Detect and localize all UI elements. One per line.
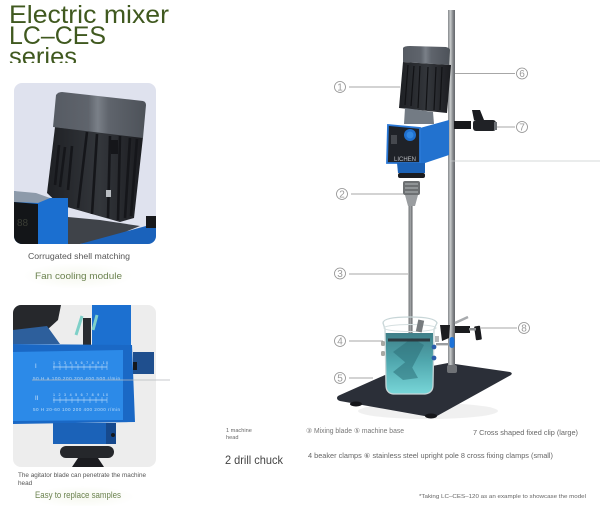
upper blue block with shaft [76,305,131,345]
motor grey cap [53,92,146,138]
mixing blade shaft [408,200,412,345]
callout 2: 2 [339,190,345,200]
drill chuck [403,181,420,206]
callout 5 [334,372,373,384]
mount base [68,216,156,244]
leader line: scale plate [32,379,170,381]
motor mount and collar [397,163,425,178]
blue scale plate: 50 H 20-60 100 200 400 2000 r/min [33,407,120,412]
black motor corner [13,305,61,344]
control box: LICHEN [394,156,416,163]
lower blue housing and collar [53,423,116,467]
legend: beaker clamps, pole and small clamps: 4 beaker clamps ⑥ stainless steel upright pole 8 cross fixing clamps (small) [308,451,553,460]
blue scale plate: 50 H a 100 200 300 400 500 r/min [33,376,120,381]
motor black body [399,62,451,113]
legend: machine head: head [226,435,238,441]
title: Electric mixer [9,1,169,29]
footnote: *Taking LC–CES–120 as an example to showcase the model [419,494,586,500]
legend: machine head [226,428,252,441]
callout 5: 5 [337,374,343,384]
cross fixing clamp small [440,317,482,348]
legend: mixing blade and machine base: ③ Mixing blade ⑤ machine base [306,427,404,435]
panel: fan cooling module photo [14,83,156,244]
title: LC–CES [9,22,106,50]
title [10,5,169,63]
caption: agitator blade: head [18,480,33,487]
blue scale plate: II [35,396,39,402]
motor grey cap [403,46,450,65]
beaker clamps [381,336,452,360]
stainless upright pole [447,10,457,373]
side clamp block [133,352,154,374]
motor body [47,127,143,222]
caption: fan cooling module [23,263,133,289]
caption: easy to replace samples: Easy to replace samples [35,490,122,500]
legend: drill chuck: 2 drill chuck [225,454,283,467]
long decorative leader [450,160,600,162]
panel: blade through head photo [13,305,156,467]
callout 8: 8 [521,324,527,334]
callout 1 [334,82,400,94]
callout 3: 3 [337,269,343,280]
callout 3 [334,268,408,280]
legend: machine head: 1 machine [226,428,252,434]
control box [387,120,449,163]
motor neck [404,108,434,124]
callout 8 [481,322,530,334]
caption: agitator blade [18,472,146,487]
beaker with turquoise liquid [383,317,437,394]
callout 6: 6 [519,69,525,80]
title: series [9,43,77,71]
blue scale plate: 1 2 3 4 5 6 7 8 9 10 [53,393,108,397]
callout 1: 1 [337,82,343,94]
callout 4: 4 [337,336,343,348]
fixing clamp large [454,110,497,131]
caption: easy to replace samples [31,486,135,506]
caption: agitator blade: The agitator blade can penetrate the machine [18,472,146,479]
blue scale plate [13,344,135,424]
control box corner [14,191,68,244]
control box corner: 88 [17,218,29,229]
caption: corrugated shell: Corrugated shell matching [28,252,130,261]
product: electric mixer on stand [337,10,600,419]
callout 7 [497,122,528,134]
caption: fan cooling module: Fan cooling module [35,270,122,281]
callout 2 [336,188,403,200]
blue scale plate: I [35,364,37,370]
blue scale plate: 1 2 3 4 5 6 7 8 9 10 [53,361,108,365]
callout 6 [455,68,528,80]
callout 7: 7 [519,122,525,134]
base plate [337,363,512,419]
legend: cross shaped fixed clip: 7 Cross shaped fixed clip (large) [473,428,578,437]
callout 4 [334,336,383,348]
